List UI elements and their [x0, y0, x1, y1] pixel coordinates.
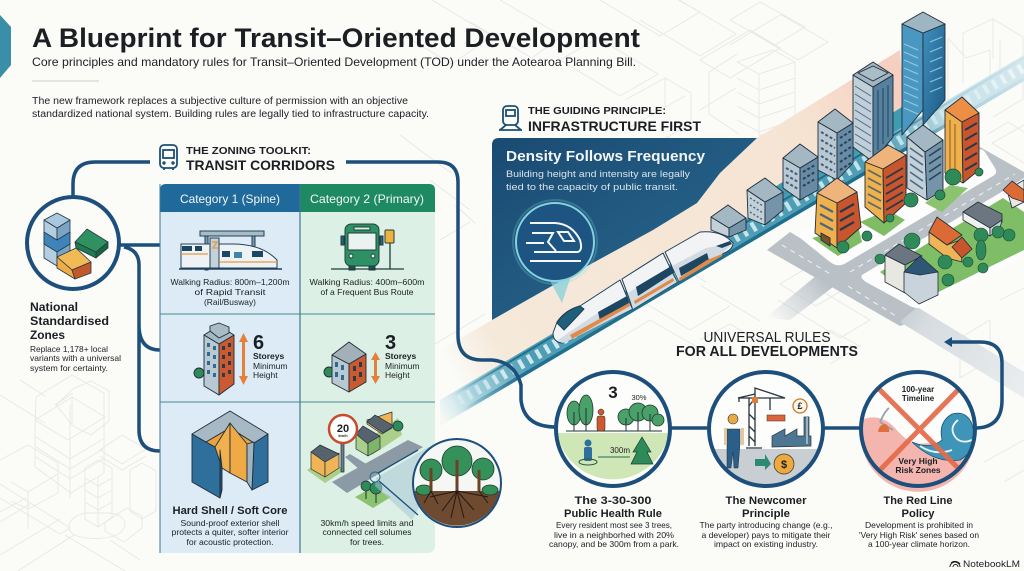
icon: flood and crossed lines: [861, 372, 975, 492]
buildings cluster: [711, 12, 979, 248]
walking radius: category 1: [170, 277, 290, 307]
arrow: three storeys: [371, 352, 380, 384]
icon: worker, crane and factory: £: [797, 401, 803, 411]
building: orange centre: [865, 145, 906, 223]
neighbourhood text: 30km/h speed limits and: [320, 518, 414, 528]
icon: three storey building: [324, 342, 366, 392]
guiding principle header: THE GUIDING PRINCIPLE:: [528, 105, 666, 117]
house: grey-blue: [963, 202, 1002, 236]
rule title: Public Health Rule: [564, 508, 662, 520]
icon: trees and park: 300m: [610, 446, 630, 455]
panel: transit corridors table: [160, 184, 435, 553]
rule title: The 3-30-300: [574, 495, 652, 507]
universal rules heading: UNIVERSAL RULES: [704, 330, 830, 346]
panel heading: Density Follows Frequency: [506, 148, 706, 165]
building: stepped grey: [783, 144, 818, 200]
garden trees: [875, 226, 1015, 286]
hard shell text: for acoustic protection.: [186, 537, 274, 547]
icon: bus and stop: [331, 224, 404, 270]
hard shell text: Sound-proof exterior shell: [180, 518, 280, 528]
description: [30, 344, 121, 373]
intro paragraph: [32, 96, 429, 120]
building: grey block: [818, 109, 853, 180]
icon: trees and park: 30%: [631, 393, 647, 402]
heading: Standardised: [30, 314, 109, 328]
rule body: canopy, and be 300m from a park.: [549, 539, 679, 549]
building: grey front: [907, 125, 943, 200]
rule body: [700, 520, 832, 549]
panel: guiding principle: [492, 138, 757, 320]
icon: flood and crossed lines: Timeline: [902, 394, 935, 403]
icon: train front: [499, 106, 522, 130]
rule title: [884, 495, 952, 520]
six storeys label: Storeys: [253, 351, 284, 361]
hard shell text: protects a quiter, softer interior: [172, 527, 289, 537]
neighbourhood text: [320, 518, 414, 547]
heading: Zones: [30, 328, 65, 342]
heading: category 1: Category 1 (Spine): [180, 192, 280, 206]
teal band behind buildings: [760, 105, 905, 225]
neighbourhood text: for trees.: [350, 537, 384, 547]
icon: flood and crossed lines: 100-year: [902, 385, 934, 394]
rule title: [564, 495, 662, 520]
house: orange far right: [1003, 180, 1024, 208]
intro paragraph: The new framework replaces a subjective culture of permission with an objective: [32, 96, 408, 107]
rule body: [549, 520, 679, 549]
callout: tree root cell: [370, 439, 501, 527]
heading: [30, 300, 109, 342]
three storeys label: Minimum: [385, 361, 419, 371]
zoning toolkit header: THE ZONING TOOLKIT:: [186, 145, 311, 157]
walking radius: category 1: Walking Radius: 800m–1,200m: [170, 277, 290, 287]
three storeys label: Storeys: [385, 351, 416, 361]
walking radius: category 2: [310, 277, 424, 297]
flow line: main connector: [346, 162, 556, 427]
icon: worker, crane and factory: $: [781, 459, 787, 471]
panel body: Building height and intensity are legally: [506, 169, 690, 180]
guiding principle header: [499, 105, 701, 134]
building: orange right: [945, 97, 979, 183]
arrow: six storeys: [239, 333, 248, 385]
building: low grey: [747, 178, 783, 225]
guiding principle header: INFRASTRUCTURE FIRST: [528, 118, 701, 134]
universal rules heading: FOR ALL DEVELOPMENTS: [676, 344, 858, 360]
rule title: Principle: [742, 508, 790, 520]
rule body: Development is prohibited in: [865, 520, 973, 530]
icon: flood and crossed lines: Risk Zones: [895, 465, 941, 475]
train: [553, 232, 733, 343]
rule body: a developer) pays to mitigate their: [702, 530, 831, 540]
icon: high speed train badge: [513, 200, 597, 303]
icon: flood and crossed lines: Very High: [898, 456, 938, 466]
icon: station and train: [179, 231, 282, 270]
rule 2: newcomer principle: [700, 372, 832, 549]
flow line: zoning to zones: [73, 162, 150, 197]
six storeys label: Height: [253, 370, 278, 380]
rule body: a 100-year climate horizon.: [868, 539, 970, 549]
national standardised zones: [27, 197, 121, 373]
icon: neighbourhood street: [307, 412, 423, 508]
flow line: rule connectors and arrow: [670, 342, 1002, 428]
rule body: live in a neighborhed with 20%: [554, 530, 674, 540]
rule title: The Red Line: [884, 495, 952, 507]
hard shell text: [172, 505, 289, 547]
building: orange front: [815, 178, 861, 248]
icon: bus: [160, 145, 177, 170]
icon: six storey building: [194, 323, 234, 395]
rule body: 'Very High Risk' senes based on: [859, 530, 979, 540]
description: variants with a universal: [30, 353, 121, 363]
zoning toolkit header: [160, 145, 335, 173]
hard shell text: Hard Shell / Soft Core: [172, 505, 288, 517]
city block: houses: [862, 190, 1024, 308]
icon: hard shell soft core: [192, 411, 268, 498]
building: grey striped: [853, 62, 893, 162]
rule 3: red line policy: [859, 372, 979, 549]
neighbourhood text: connected cell solumes: [322, 527, 412, 537]
walking radius: category 2: of a Frequent Bus Route: [320, 287, 414, 297]
car 2: [622, 253, 677, 309]
rule title: Policy: [902, 508, 935, 520]
icon: worker, crane and factory: [709, 372, 823, 488]
rule body: Every resident most see 3 trees,: [556, 520, 672, 530]
three storeys label: [385, 332, 419, 380]
house: orange: [929, 217, 972, 262]
city block: mid-rise: [798, 149, 996, 265]
intro paragraph: standardized national system. Building rules are legally tied to infrastructure capacity.: [32, 109, 429, 120]
title: A Blueprint for Transit–Oriented Development: [32, 23, 640, 53]
icon: trees and park: [556, 372, 670, 486]
house: grey two storey: [885, 244, 938, 304]
track: [440, 55, 1024, 426]
building: lowest grey: [711, 205, 746, 237]
rule 1: 3-30-300: [549, 372, 679, 549]
description: system for certainty.: [30, 363, 108, 373]
icon: lego bricks: [27, 197, 119, 289]
panel body: [506, 169, 690, 193]
car 1: [553, 280, 632, 343]
icon: neighbourhood street: 20: [337, 423, 349, 435]
description: Replace 1,178+ local: [30, 344, 108, 354]
flow line: zones to table: [118, 245, 160, 451]
car 3: [665, 232, 733, 281]
three storeys label: 3: [385, 332, 396, 354]
panel body: tied to the capacity of public transit.: [506, 182, 678, 193]
three storeys label: Height: [385, 370, 410, 380]
cream band: [440, 50, 905, 410]
arrow head: [944, 337, 952, 347]
rule title: [726, 495, 807, 520]
heading: National: [30, 300, 78, 314]
icon: trees and park: 3: [608, 383, 618, 402]
rule body: The party introducing change (e.g.,: [700, 520, 832, 530]
walking radius: category 1: of Rapid Transit: [194, 287, 266, 297]
houses: [885, 180, 1024, 304]
hero: transit band, track and train: [440, 50, 1024, 426]
zoning toolkit header: TRANSIT CORRIDORS: [186, 157, 335, 173]
universal rules heading: [676, 330, 858, 360]
road network: [765, 147, 1024, 398]
rule title: The Newcomer: [726, 495, 807, 507]
rule body: [859, 520, 979, 549]
icon: neighbourhood street: km/h: [338, 433, 348, 438]
six storeys label: 6: [253, 332, 264, 354]
NotebookLM watermark: NotebookLM: [963, 559, 1020, 570]
rule body: impact on existing industry.: [714, 539, 818, 549]
six storeys label: [253, 332, 287, 380]
six storeys label: Minimum: [253, 361, 287, 371]
heading: category 2: Category 2 (Primary): [310, 192, 424, 206]
walking radius: category 2: Walking Radius: 400m–600m: [310, 277, 424, 287]
building: glass tower: [902, 12, 945, 135]
walking radius: category 1: (Rail/Busway): [204, 297, 256, 307]
subtitle: Core principles and mandatory rules for Transit–Oriented Development (TOD) under the Aotearoa Planning Bill.: [32, 55, 636, 69]
top-left hexagon accent: [0, 15, 11, 78]
street trees: [837, 168, 983, 253]
